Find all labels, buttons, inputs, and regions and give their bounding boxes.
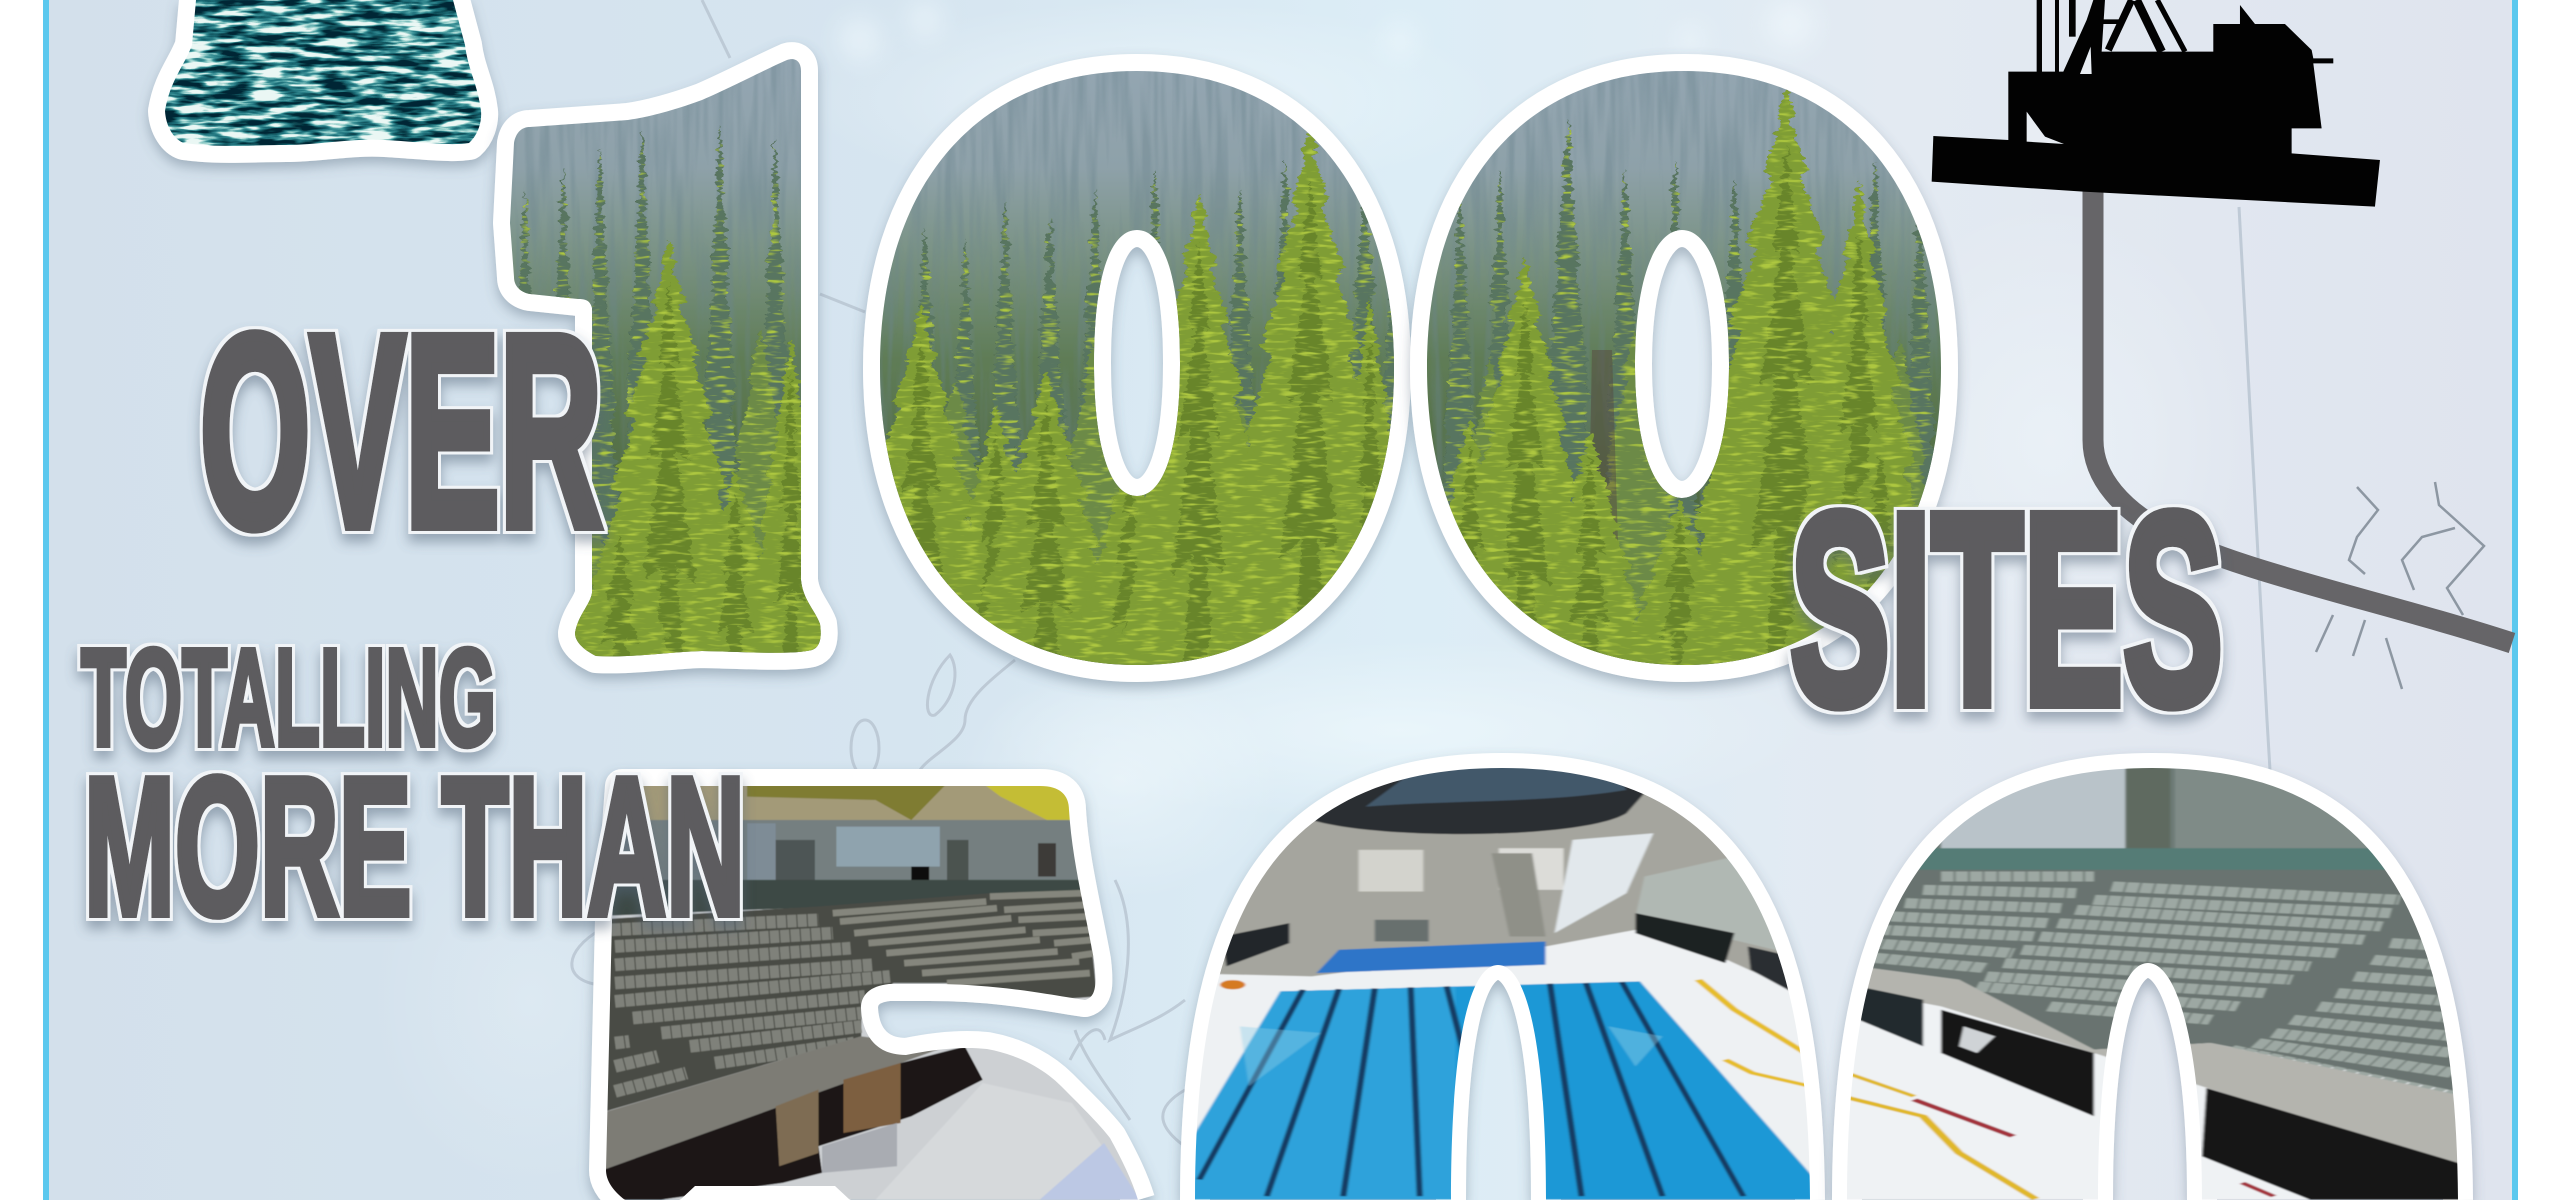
seating base: [590, 890, 1097, 1116]
wall and ceiling: [1220, 794, 1778, 977]
pipeline: [2093, 185, 2512, 643]
seating base: [1833, 870, 2481, 1096]
photo digit: 5 with stadium: [590, 770, 1140, 1200]
floor highlight and pool glimpse: [878, 1084, 1100, 1200]
concrete beam: [590, 1036, 947, 1175]
upper wall: [623, 820, 1078, 881]
word: TOTALLING: TOTALLING: [81, 621, 496, 775]
hoses: [1842, 1073, 2274, 1199]
black wall and panels: [590, 1046, 983, 1200]
roof band: [643, 786, 1047, 821]
photo digit: first 0 with forest: [856, 54, 1414, 694]
photo digit: water fragment: [140, 0, 500, 170]
ground cracks: [2316, 482, 2484, 689]
faint map contours: [572, 0, 2270, 1150]
main pool: [1177, 981, 1833, 1200]
photo digit: 1 with forest: [487, 42, 844, 686]
words: MORE THAN: MORE THAN: [84, 737, 745, 956]
deck: [1196, 930, 1810, 1200]
word: OVER: OVER: [200, 279, 602, 583]
photo digit: second 0 with forest: [1403, 54, 1964, 694]
concrete band: [1833, 963, 2481, 1173]
right seats: [1635, 857, 1797, 953]
photo digit: second 0 with stadium seats: [1833, 763, 2481, 1200]
drilling rig silhouette: [1932, 0, 2380, 207]
dark windows and wall: [1842, 983, 1923, 1046]
floor: [608, 908, 1136, 1200]
photo digit: first 0 with swimming pool: [1177, 763, 1833, 1200]
diving pool: [1316, 941, 1546, 973]
word: SITES: SITES: [1790, 457, 2223, 761]
deck: [1833, 763, 2481, 1200]
upper wall: [1833, 763, 2481, 873]
